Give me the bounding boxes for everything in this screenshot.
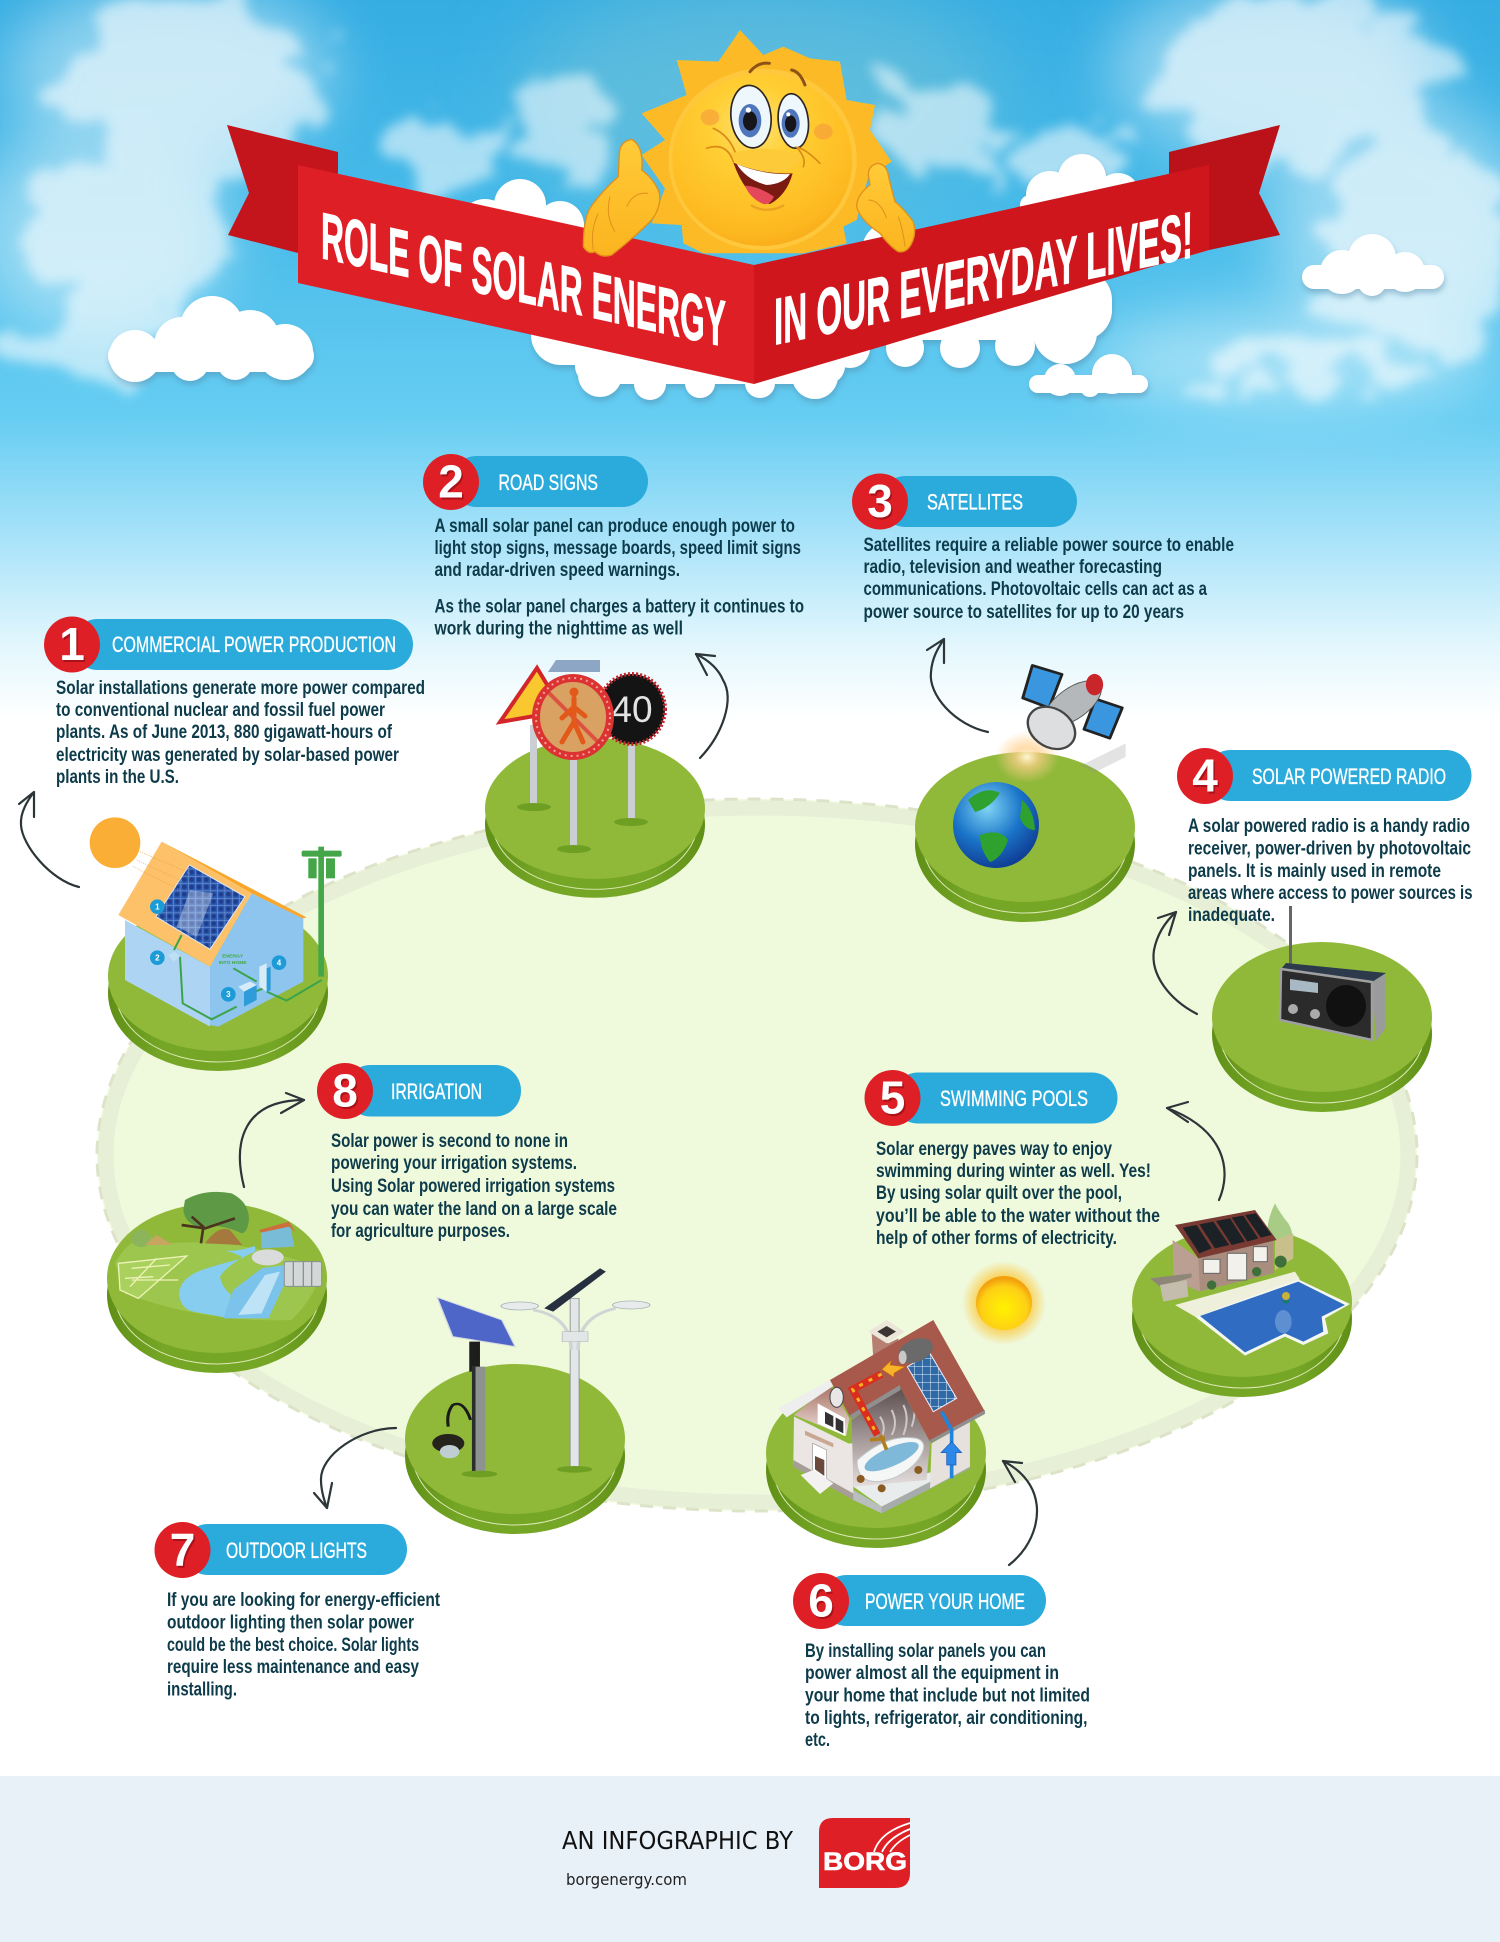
pedestrian sign	[536, 678, 610, 756]
meters	[238, 963, 271, 1007]
banner: ROLE OF SOLAR ENERGY	[321, 200, 726, 362]
gable	[794, 1385, 849, 1436]
platform discs	[107, 738, 1432, 1548]
pole shadows	[517, 803, 648, 853]
label 2	[423, 454, 648, 510]
sky background	[0, 0, 1500, 720]
text 8: Using Solar powered irrigation systems	[331, 1176, 615, 1197]
label 7: 7	[170, 1524, 195, 1576]
house number badges: 4	[277, 958, 282, 967]
black speed sign: 40	[611, 689, 653, 730]
BORG logo: BORG	[823, 1848, 907, 1876]
river	[179, 1246, 255, 1317]
windows	[818, 1403, 845, 1436]
soft background clouds	[0, 0, 1500, 410]
text 1	[56, 678, 425, 788]
gable eave	[778, 1380, 833, 1417]
radio top panel	[1281, 963, 1386, 982]
cloud: right	[1302, 234, 1444, 296]
earth	[953, 782, 1039, 868]
door	[813, 1443, 827, 1479]
text 6: to lights, refrigerator, air conditioning,	[805, 1708, 1088, 1729]
mouth	[733, 163, 793, 210]
flare	[995, 731, 1059, 783]
label 4	[1177, 748, 1472, 804]
sun mascot	[642, 30, 892, 253]
solar panel on roof	[907, 1353, 957, 1412]
chimney	[872, 1333, 898, 1360]
sun hands	[583, 139, 915, 256]
label 1: COMMERCIAL POWER PRODUCTION	[112, 632, 396, 657]
bath feet	[857, 1466, 922, 1492]
pipe	[284, 1262, 322, 1286]
footer	[0, 1776, 1500, 1942]
rock	[252, 1249, 284, 1265]
banner right panel	[754, 165, 1209, 384]
section 3: satellites	[852, 474, 1234, 623]
tree	[1267, 1203, 1292, 1240]
label 8	[317, 1063, 521, 1119]
tree canopy	[183, 1192, 249, 1233]
section 8: irrigation	[317, 1063, 617, 1242]
arrows	[19, 639, 1225, 1565]
farmhouse	[261, 1225, 294, 1248]
radio front	[1280, 969, 1372, 1040]
sun rays	[642, 30, 892, 253]
cloud: upper left behind banner	[459, 179, 584, 275]
arrow 4	[1153, 912, 1197, 1014]
arrow 8	[240, 1093, 304, 1187]
label 3: SATELLITES	[927, 490, 1023, 514]
footer band	[0, 1776, 1500, 1942]
website: borgenergy.com	[566, 1870, 687, 1889]
text 3: Satellites require a reliable power source to enable	[864, 535, 1234, 556]
label 7	[154, 1522, 407, 1578]
label 2: ROAD SIGNS	[498, 470, 598, 495]
section 6: power your home	[793, 1573, 1090, 1751]
hill	[145, 1235, 173, 1245]
text 3: radio, television and weather forecasting	[864, 557, 1162, 578]
waterfall	[223, 1265, 285, 1318]
label 2: 2	[438, 456, 464, 508]
label 5: 5	[880, 1072, 905, 1124]
label 1: 1	[59, 618, 85, 670]
text 2: work during the nighttime as well	[434, 618, 683, 640]
label 7: 7	[171, 1526, 197, 1578]
right wall	[210, 893, 303, 1027]
arrow 5	[1167, 1102, 1225, 1200]
faucet	[870, 1435, 887, 1450]
arrow 6	[1003, 1461, 1037, 1565]
text 8: you can water the land on a large scale	[331, 1199, 617, 1220]
pool water	[1200, 1282, 1345, 1352]
pole bases	[462, 1466, 592, 1477]
cloud: left	[108, 296, 314, 382]
house number badges: 1	[155, 902, 160, 911]
house side wall	[1173, 1240, 1200, 1292]
double lamp pole	[570, 1298, 579, 1469]
label 1	[44, 616, 413, 672]
house number badges	[150, 899, 286, 1002]
steps	[801, 1470, 833, 1494]
arrow 7	[314, 1428, 396, 1508]
text 5: swimming during winter as well. Yes!	[876, 1161, 1151, 1182]
bath tub	[857, 1436, 924, 1482]
text 4: panels. It is mainly used in remote	[1188, 861, 1441, 882]
text 4	[1188, 816, 1472, 926]
text 8: Solar power is second to none in	[331, 1131, 568, 1152]
panel	[437, 1297, 515, 1347]
steam	[880, 1398, 915, 1437]
banner left tail	[227, 125, 338, 253]
text 2: A small solar panel can produce enough power to	[434, 516, 795, 537]
junction box	[168, 952, 180, 962]
cloud: behind right of sun	[850, 222, 940, 295]
text 1: Solar installations generate more power compared	[56, 678, 425, 699]
attribution: AN INFOGRAPHIC BY	[562, 1826, 794, 1855]
sun circle	[90, 817, 140, 868]
roof	[118, 842, 252, 967]
text 8	[331, 1131, 617, 1242]
label 8: 8	[334, 1066, 359, 1118]
label 4: 4	[1194, 752, 1220, 804]
text 5: By using solar quilt over the pool,	[876, 1183, 1122, 1204]
section 4: solar powered radio	[1177, 748, 1472, 926]
icon: solar home with bath	[778, 1320, 985, 1513]
eyes	[728, 83, 811, 150]
label 5	[864, 1070, 1118, 1126]
pool highlight	[1275, 1310, 1292, 1333]
central ellipse track	[97, 799, 1417, 1511]
arrow 1	[19, 792, 79, 887]
text 1: electricity was generated by solar-based power	[56, 745, 399, 766]
left wall	[793, 1417, 853, 1500]
nose and smile lines	[707, 128, 820, 173]
label 8: 8	[332, 1064, 358, 1116]
energy into home label	[219, 954, 247, 966]
windows and door	[1203, 1247, 1267, 1280]
icon: road signs	[500, 660, 665, 853]
house number badges: 2	[155, 953, 160, 962]
text 7: could be the best choice. Solar lights	[167, 1635, 419, 1656]
text 2: and radar-driven speed warnings.	[434, 560, 680, 581]
lamp panel	[544, 1268, 606, 1312]
lamp pole	[469, 1342, 480, 1372]
knobs	[1288, 1004, 1320, 1019]
antenna	[1289, 906, 1292, 966]
left wall	[125, 920, 210, 1027]
label 6: 6	[808, 1574, 834, 1626]
energy into home label: INTO HOME	[219, 960, 247, 966]
section 2: road signs	[423, 454, 804, 640]
interior	[852, 1387, 930, 1487]
utility pole	[302, 847, 342, 977]
tree trunk	[182, 1217, 235, 1243]
triangle sign	[500, 668, 563, 722]
pool deck	[1175, 1272, 1300, 1317]
round window	[830, 1387, 843, 1407]
icon: pool house	[1150, 1203, 1350, 1356]
text 6: power almost all the equipment in	[805, 1663, 1059, 1684]
text 5: help of other forms of electricity.	[876, 1228, 1117, 1249]
wiring	[174, 935, 322, 1019]
roof	[1175, 1210, 1277, 1258]
sun face	[669, 69, 857, 250]
text 8: powering your irrigation systems.	[331, 1153, 577, 1174]
text 2: light stop signs, message boards, speed limit signs	[434, 538, 801, 559]
icon: small sun	[962, 1261, 1046, 1345]
text 6	[805, 1641, 1090, 1751]
icon: satellite and earth	[953, 665, 1126, 868]
label 6: POWER YOUR HOME	[865, 1589, 1025, 1614]
tank	[895, 1333, 937, 1368]
label 5: SWIMMING POOLS	[940, 1086, 1088, 1111]
floor slab	[853, 1462, 970, 1507]
text 6: By installing solar panels you can	[805, 1641, 1046, 1662]
right wall	[930, 1422, 970, 1488]
banner left panel	[298, 165, 754, 384]
section 5: swimming pools	[864, 1070, 1160, 1249]
poles	[530, 725, 635, 849]
icon: outdoor lights	[432, 1268, 650, 1477]
hanging lamp	[432, 1404, 471, 1458]
label 7: OUTDOOR LIGHTS	[226, 1538, 367, 1563]
text 2	[434, 516, 804, 640]
solar panel	[156, 865, 245, 949]
label 2: 2	[440, 458, 465, 510]
label 3	[852, 474, 1077, 530]
label 4: 4	[1192, 750, 1218, 802]
hot pipe	[853, 1374, 882, 1435]
label 3: 3	[869, 477, 894, 529]
text 1: to conventional nuclear and fossil fuel power	[56, 700, 385, 721]
section 1: commercial power production	[44, 616, 425, 788]
label 6	[793, 1573, 1046, 1629]
text 7	[167, 1590, 441, 1700]
brows	[750, 63, 805, 85]
left hand	[583, 139, 660, 256]
crisp white clouds	[108, 154, 1444, 400]
rock and tree base	[205, 1229, 242, 1245]
text 7: require less maintenance and easy	[167, 1657, 419, 1678]
label 3: 3	[867, 475, 893, 527]
far field	[115, 1238, 322, 1320]
cloud: lower right	[1029, 354, 1148, 397]
cheeks	[701, 109, 833, 140]
radio side	[1372, 973, 1386, 1041]
text 5: you’ll be able to the water without the	[876, 1206, 1160, 1227]
bracket	[562, 1332, 588, 1342]
water pipe	[942, 1412, 952, 1478]
text 3	[864, 535, 1234, 623]
text 5: Solar energy paves way to enjoy	[876, 1139, 1112, 1160]
text 8: for agriculture purposes.	[331, 1221, 510, 1242]
right hand	[857, 163, 915, 252]
text 3: communications. Photovoltaic cells can act as a	[864, 579, 1207, 600]
awning	[805, 1431, 833, 1447]
house front wall	[1198, 1240, 1274, 1292]
banner	[227, 125, 1280, 384]
text 1: plants. As of June 2013, 880 gigawatt-hours of	[56, 722, 393, 743]
main roof	[830, 1320, 985, 1442]
label 5: 5	[881, 1074, 907, 1126]
text 5	[876, 1139, 1160, 1249]
text 7: outdoor lighting then solar power	[167, 1612, 414, 1634]
icon: solar house	[90, 817, 342, 1027]
sun rays	[133, 852, 190, 890]
icon: irrigation scene	[115, 1192, 322, 1320]
hedge	[1275, 1233, 1293, 1270]
speaker	[1326, 985, 1366, 1027]
label 6: 6	[810, 1576, 835, 1628]
text 7: installing.	[167, 1680, 237, 1700]
arrow 2	[696, 654, 728, 758]
cloud: upper right behind banner	[1020, 154, 1142, 245]
BORG logo	[819, 1818, 910, 1888]
house number badges: 3	[226, 990, 231, 999]
roof panels	[1183, 1213, 1272, 1253]
label 8: IRRIGATION	[391, 1079, 482, 1104]
pool float	[1282, 1292, 1290, 1303]
text 7: If you are looking for energy-efficient	[167, 1590, 441, 1611]
text 1: plants in the U.S.	[56, 767, 179, 788]
planters	[1207, 1256, 1287, 1290]
black speed sign	[599, 674, 665, 744]
energy into home label: ENERGY	[222, 954, 244, 960]
text 4: inadequate.	[1188, 905, 1275, 926]
icon: solar radio	[1280, 906, 1386, 1041]
arrow 3	[927, 639, 988, 732]
text 6: etc.	[805, 1730, 830, 1751]
section 7: outdoor lights	[154, 1522, 441, 1700]
fields	[118, 1256, 187, 1298]
text 3: power source to satellites for up to 20 years	[864, 602, 1184, 623]
banner right tail	[1169, 125, 1280, 250]
text 2: As the solar panel charges a battery it continues to	[434, 596, 804, 618]
satellite	[1019, 665, 1126, 773]
text 6: your home that include but not limited	[805, 1686, 1090, 1706]
small tree	[131, 1230, 151, 1247]
cloud: centre	[531, 270, 1112, 400]
label 1: 1	[61, 620, 86, 672]
display	[1290, 979, 1318, 993]
pool edge	[1195, 1279, 1350, 1356]
solar panel	[548, 660, 600, 672]
pergola	[1150, 1273, 1192, 1302]
